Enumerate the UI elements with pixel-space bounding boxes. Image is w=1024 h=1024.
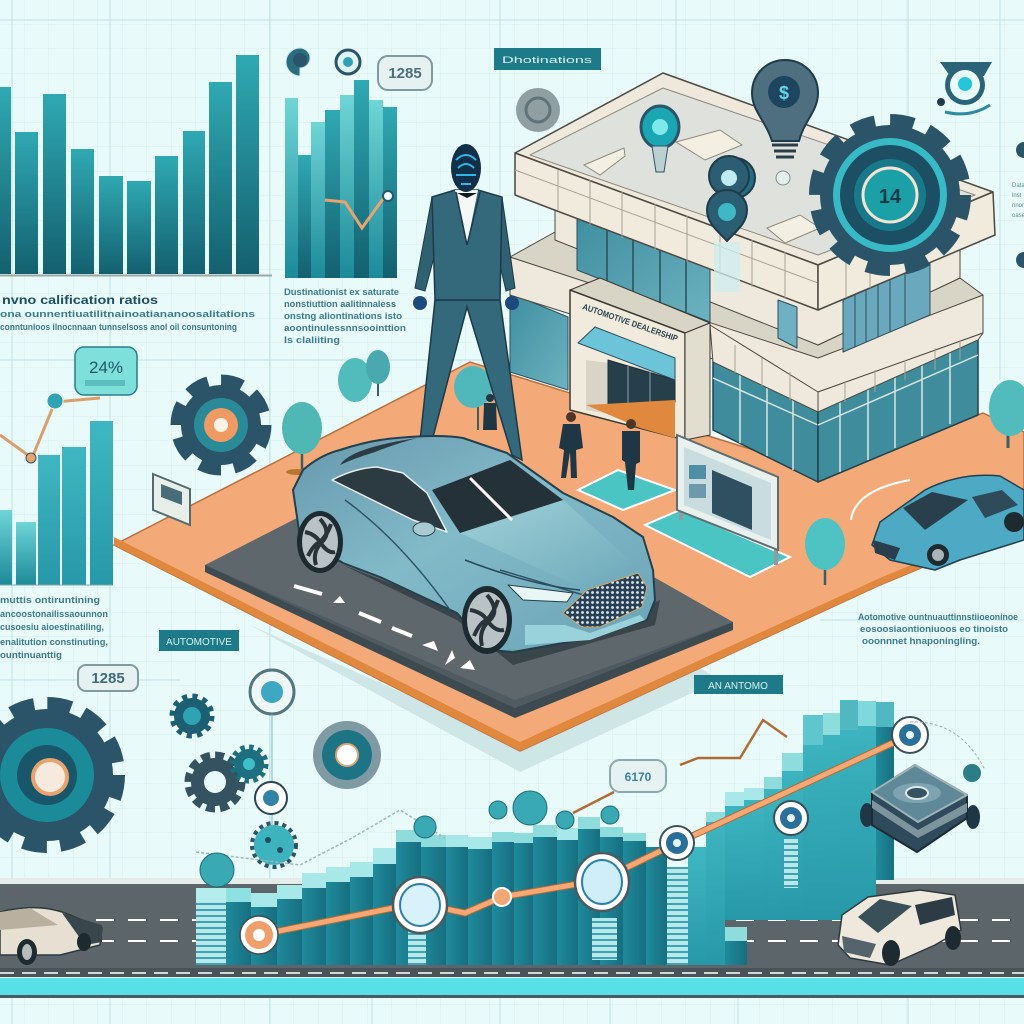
text block: centre description: aoontinulessnnsoointtion — [284, 323, 406, 333]
roof items: signs and pins — [584, 60, 820, 292]
bar chart: top centre — [285, 80, 397, 278]
node — [493, 888, 511, 906]
callout: number bubble on bottom chart — [610, 760, 666, 792]
masked head — [451, 144, 481, 192]
white SUV on road — [838, 890, 961, 966]
white coupe on road — [0, 908, 102, 965]
text block: centre description: Is claliiting — [284, 335, 340, 345]
people — [483, 394, 640, 490]
icon: large gear with dial: 14 — [879, 186, 902, 208]
icon: sensor box — [860, 722, 985, 852]
windshield — [432, 460, 563, 533]
icon: document card — [153, 474, 190, 525]
text block: centre description: nonstiuttion aalitinnaless — [284, 299, 396, 309]
text fragment: right edge: lnst — [1012, 193, 1022, 199]
icon: large bottom-left gear — [0, 704, 118, 846]
bar chart: bottom rising bars — [196, 700, 894, 965]
text block: centre description — [284, 287, 406, 345]
second floor wall — [555, 200, 960, 345]
stripe stems under nodes — [408, 838, 798, 965]
thin upper trend line — [196, 720, 787, 865]
text block: left middle description: ountinuanttig — [0, 650, 62, 661]
text block: right description — [858, 612, 1018, 647]
building sign: AUTOMOTIVE DEALERSHIP — [581, 301, 679, 344]
car shadow — [343, 565, 660, 665]
callout: number bubble left — [78, 665, 138, 691]
icon: orange core gear — [176, 380, 266, 470]
node — [393, 877, 447, 933]
text block: left description: conntunloos ilnocnnaan tunnselsoss anol oil consuntoning — [0, 322, 237, 333]
mirror — [413, 522, 435, 536]
entrance portal — [570, 278, 710, 333]
front bumper — [525, 615, 645, 645]
callout: number bubble top — [378, 56, 432, 90]
side windows — [332, 467, 447, 532]
node — [660, 826, 694, 860]
small blue car right — [851, 475, 1024, 570]
text block: left middle description — [0, 595, 108, 661]
headlight — [508, 585, 573, 602]
roof fascia right — [818, 192, 995, 310]
icon: pins above centre chart — [286, 48, 360, 76]
label: automotive tag — [159, 630, 239, 651]
first floor left wing glass — [510, 293, 568, 390]
text block: left description: ona ounnentiuatilitnainoatiananoosalitations — [0, 309, 255, 320]
text block: right description: eosoosiaontioniuoos eo tinoisto — [860, 624, 1008, 635]
top bead nodes — [200, 791, 619, 887]
ground floor glass left face — [713, 360, 818, 482]
text fragment: right edge — [1012, 142, 1024, 268]
rear wheel — [297, 511, 343, 573]
text block: left middle description: ancoostonailissaounnon — [0, 609, 108, 620]
ground floor glass right face — [818, 338, 978, 482]
road with lane markings — [0, 878, 1024, 998]
bottom margin ticks — [12, 998, 908, 1024]
figure in tuxedo — [413, 144, 522, 460]
platform: orange base — [114, 362, 1024, 772]
icon: large gear with dial — [815, 120, 965, 270]
text block: left middle description: enalitution constinuting, — [0, 637, 108, 648]
text block: left middle description: muttis ontiruntining — [0, 595, 100, 606]
torso — [432, 190, 502, 300]
front wheel — [462, 586, 512, 654]
sunroof — [340, 438, 417, 465]
label: AI automotive tag — [694, 675, 783, 694]
display board — [677, 435, 778, 565]
text block: right description: ooonnnet hnaponingling. — [862, 636, 980, 647]
lower door highlight — [345, 500, 600, 610]
text block: centre description: Dustinationist ex saturate — [284, 287, 399, 297]
bar chart: left middle — [0, 393, 113, 585]
hero sedan car — [293, 436, 660, 665]
small gears cluster — [172, 670, 381, 867]
line chart: orange trend with nodes — [200, 717, 928, 954]
bar chart: top left — [0, 55, 272, 276]
trees — [282, 350, 1024, 585]
callout: percentage: 24% — [89, 358, 123, 377]
text block: centre description: onstng aliontinations isto — [284, 311, 403, 321]
icon: top right eye badge — [937, 62, 992, 114]
icon: blurred circle near roof — [516, 88, 560, 132]
label: top tag: Dhotinations — [502, 55, 593, 65]
text block: left middle description: cusoesiu aioestinatiling, — [0, 622, 104, 633]
second floor glass — [577, 218, 710, 322]
hood — [460, 500, 633, 587]
arms — [415, 197, 440, 291]
building — [510, 73, 995, 482]
callout: number bubble on bottom chart: 6170 — [625, 770, 652, 784]
node — [892, 717, 928, 753]
roof fascia left — [515, 153, 818, 310]
label: top tag — [494, 48, 601, 70]
roof top — [515, 73, 993, 265]
node — [240, 916, 278, 954]
callout: number bubble top: 1285 — [388, 65, 422, 82]
node — [575, 853, 629, 911]
legs — [418, 300, 522, 460]
first floor parapet — [510, 257, 983, 392]
heading: calibration ratios: nvno calification ratios — [2, 295, 158, 307]
grille — [563, 573, 647, 627]
label: AI automotive tag: AN ANTOMO — [708, 681, 768, 692]
callout: number bubble left: 1285 — [91, 670, 125, 687]
dark road slab — [205, 450, 733, 718]
entrance awning — [578, 327, 675, 380]
teal mats — [578, 470, 790, 577]
roof items: signs and pins: $ — [779, 83, 789, 103]
callout: percentage — [75, 347, 137, 395]
node — [774, 801, 808, 835]
text block: left description — [0, 309, 255, 333]
entrance doors — [608, 360, 675, 410]
label: automotive tag: AUTOMOTIVE — [166, 637, 232, 648]
